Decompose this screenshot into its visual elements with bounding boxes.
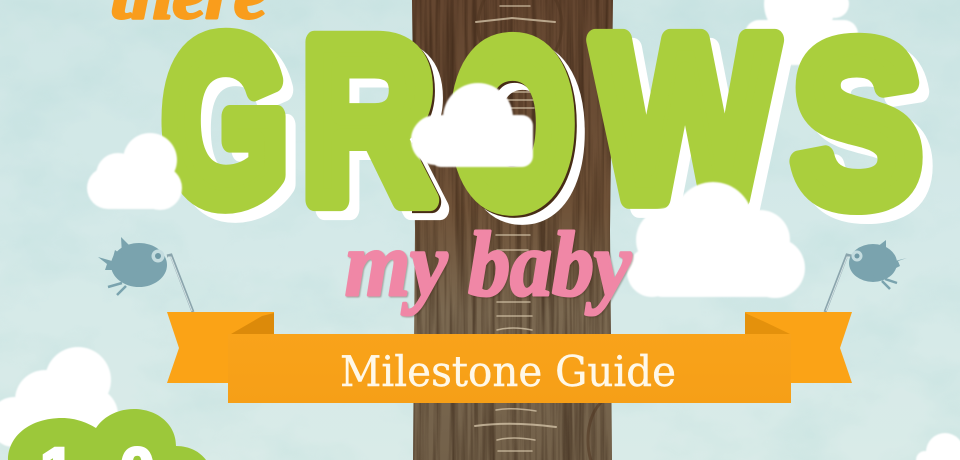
heading: GROWS: S [793,0,921,251]
cloud: bottom right [916,433,960,460]
ribbon right fold [745,313,790,334]
heading: GROWS: O [452,0,573,251]
ribbon label: Milestone Guide [340,347,676,396]
cloud: right of pink text [627,182,805,298]
wooden growth chart post [412,0,613,460]
heading: GROWS: R [302,0,434,250]
bird: left [98,237,193,312]
heading: my baby: my baby [345,213,632,315]
bird: right [825,240,907,312]
cloud: bottom left [0,347,118,447]
age badge cloud [8,409,206,460]
ribbon string [167,255,193,312]
cloud: top right behind S [745,0,858,65]
wood knots [478,0,602,460]
ribbon main band [228,334,791,403]
ribbon banner [167,312,852,403]
ribbon string [825,255,851,312]
ribbon left tail [167,312,274,383]
ribbon right tail [745,312,852,383]
cloud: centre on the O [411,83,533,167]
ruler stitch marks [475,6,556,451]
ribbon left fold [231,313,274,334]
heading: GROWS [163,0,921,251]
cloud: left small [87,133,182,210]
